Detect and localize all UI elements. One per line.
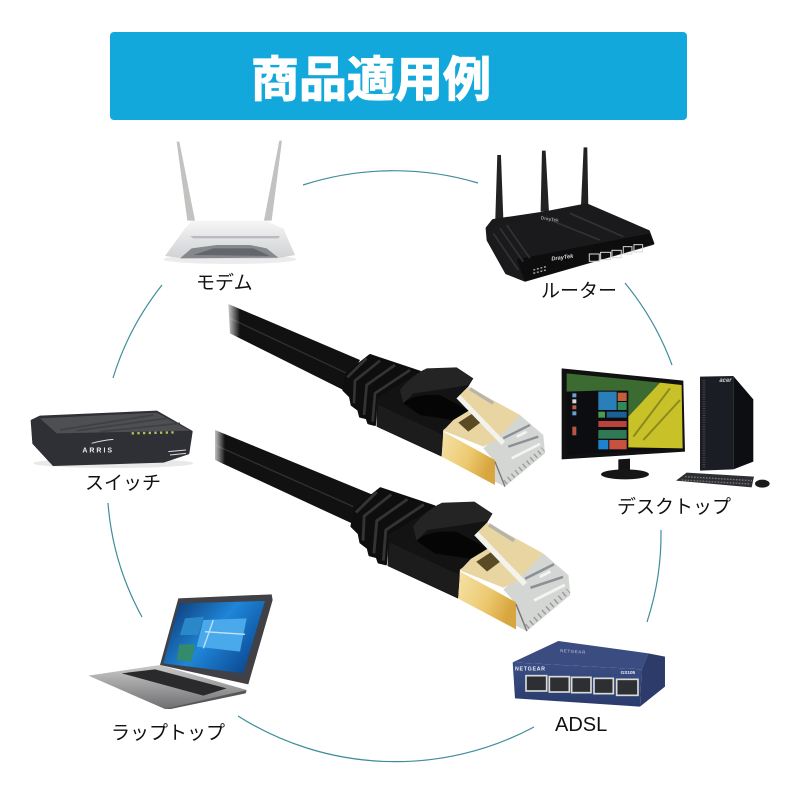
title banner xyxy=(110,32,687,120)
icon: network hub: NETGEAR xyxy=(515,667,546,673)
connecting circle arcs xyxy=(108,171,672,762)
label: laptop: ラップトップ xyxy=(111,722,225,744)
lower cable xyxy=(212,427,570,631)
icon: network hub xyxy=(513,641,665,707)
icon: switch box xyxy=(32,412,193,468)
icon: router: DrayTek xyxy=(540,215,559,223)
icon: desktop computer xyxy=(562,368,770,488)
ethernet cable with two connectors xyxy=(212,300,570,631)
monitor tiles xyxy=(572,392,627,449)
label: modem: モデム xyxy=(196,272,253,294)
icon: router xyxy=(487,147,654,282)
label: desktop: デスクトップ xyxy=(617,496,731,518)
label: switch: スイッチ xyxy=(85,473,161,494)
title: 商品適用例 xyxy=(251,54,491,107)
router ports xyxy=(589,245,643,261)
hub ports xyxy=(526,676,638,695)
label: ADSL: ADSL xyxy=(555,714,607,736)
icon: router: DrayTek xyxy=(551,253,575,263)
upper cable xyxy=(225,300,545,487)
laptop screen windows xyxy=(177,617,247,662)
icon: switch box: ARRIS xyxy=(82,448,114,455)
icon: network hub: GS105 xyxy=(621,670,636,675)
icon: laptop xyxy=(88,594,273,709)
icon: network hub: NETGEAR xyxy=(560,648,586,655)
icon: modem xyxy=(163,141,297,264)
icon: desktop computer: acer xyxy=(719,378,732,384)
label: router: ルーター xyxy=(541,280,617,302)
